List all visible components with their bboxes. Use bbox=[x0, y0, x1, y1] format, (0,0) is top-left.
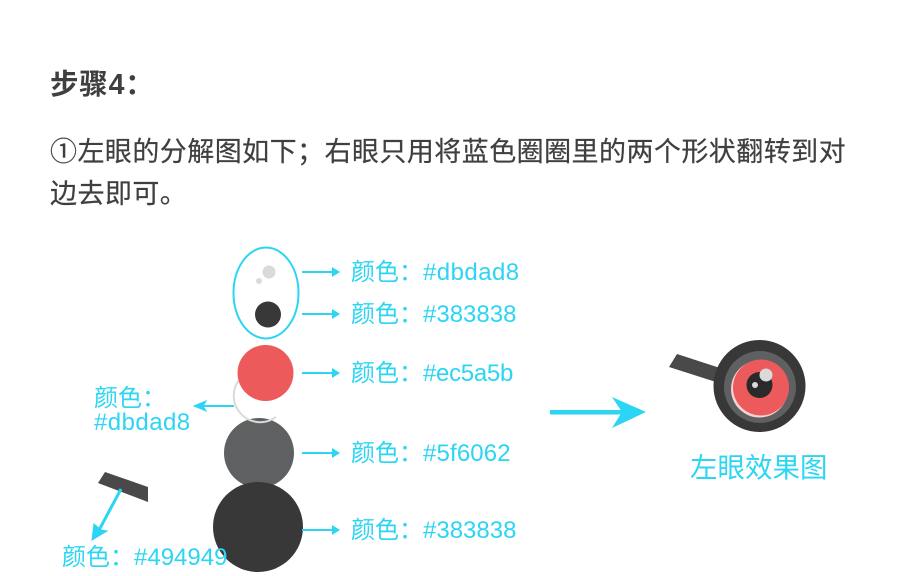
arrow: bar label bbox=[92, 489, 121, 540]
arrow: to crescent label bbox=[194, 401, 234, 411]
label: bar color: 颜色：#494949 bbox=[62, 544, 227, 571]
label: crescent color: 颜色： bbox=[94, 385, 166, 412]
red circle bbox=[238, 345, 294, 401]
label: red color: 颜色：#ec5a5b bbox=[351, 360, 513, 387]
gray circle bbox=[224, 418, 294, 488]
heading: step 4: 步骤4： bbox=[50, 69, 155, 101]
text block: instructions: ①左眼的分解图如下；右眼只用将蓝色圈圈里的两个形状翻转到对 bbox=[50, 137, 846, 167]
arrow: to dark label bbox=[302, 525, 340, 535]
label: highlight color: 颜色：#dbdad8 bbox=[351, 259, 520, 286]
label: crescent color: #dbdad8 bbox=[94, 409, 191, 436]
dark circle bbox=[213, 482, 303, 572]
label: result caption: 左眼效果图 bbox=[690, 452, 828, 483]
arrow: to gray label bbox=[302, 448, 340, 458]
dark bar shape bbox=[98, 472, 148, 502]
big arrow bbox=[550, 397, 646, 428]
text block: instructions bbox=[50, 137, 846, 209]
label: pupil color: 颜色：#383838 bbox=[351, 301, 516, 328]
label: dark color: 颜色：#383838 bbox=[351, 517, 516, 544]
light crescent layer bbox=[234, 379, 276, 422]
arrow: to pupil label bbox=[302, 309, 340, 319]
arrow: to highlight label bbox=[302, 267, 340, 277]
label: gray color: 颜色：#5f6062 bbox=[351, 440, 511, 467]
blue outline ellipse with highlights and pupil bbox=[234, 248, 298, 338]
result eye icon bbox=[669, 340, 806, 432]
text block: instructions: 边去即可。 bbox=[50, 179, 187, 209]
arrow: to red label bbox=[302, 368, 340, 378]
